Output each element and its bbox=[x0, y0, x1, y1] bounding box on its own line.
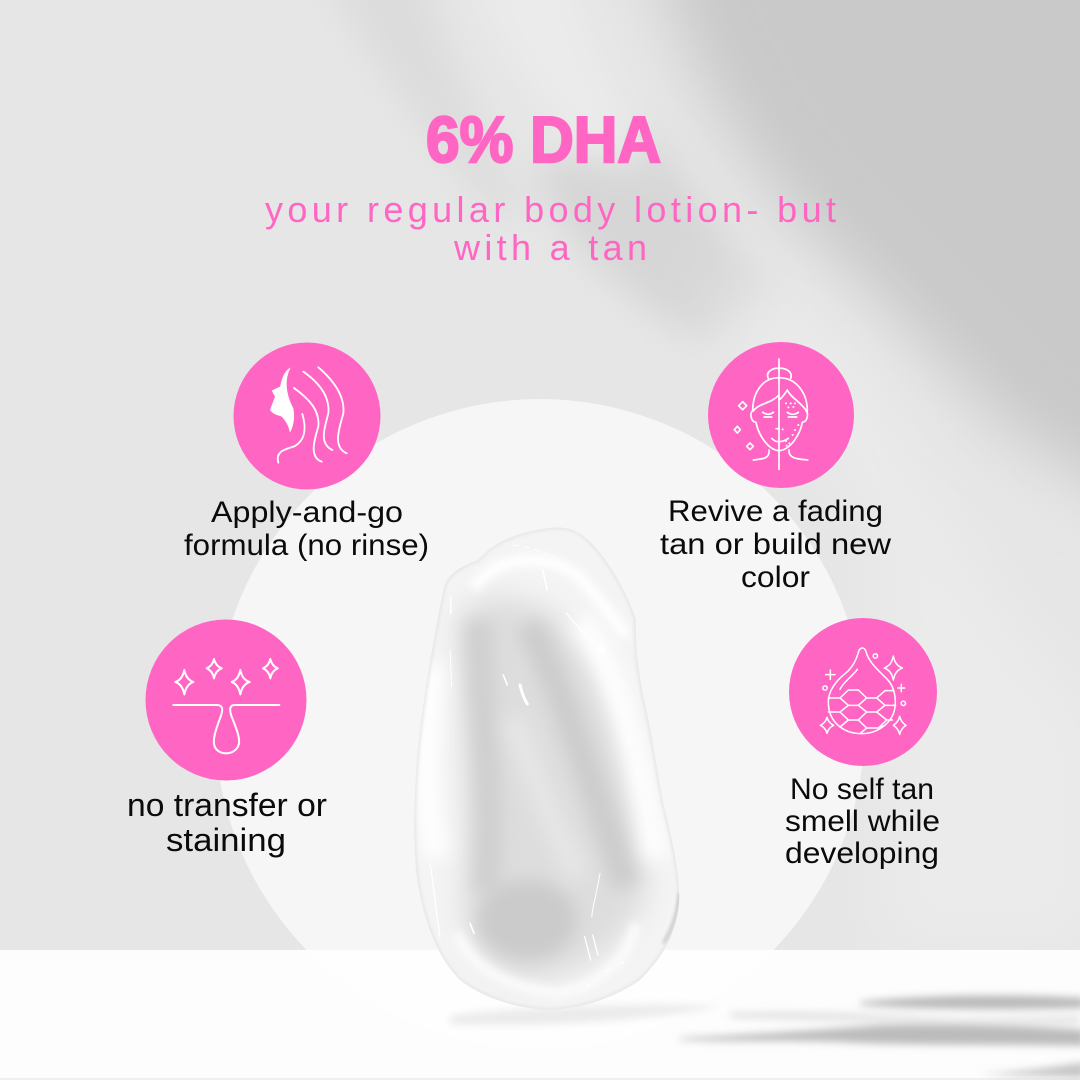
label: apply-and-go: formula (no rinse) bbox=[184, 529, 429, 562]
label: no smell: smell while bbox=[785, 805, 940, 838]
background wall with soft shadows bbox=[358, 0, 1080, 492]
label: revive tan: Revive a fading bbox=[668, 495, 883, 528]
title: 6% DHA bbox=[426, 103, 661, 176]
label: no transfer bbox=[127, 787, 327, 858]
label: revive tan: tan or build new bbox=[660, 528, 891, 561]
feature: revive tan bbox=[660, 342, 891, 594]
large translucent circle bbox=[215, 399, 865, 1049]
subtitle: your regular body lotion- but bbox=[265, 189, 836, 230]
feature: apply-and-go bbox=[184, 342, 429, 562]
lotion swatch bbox=[414, 527, 679, 1010]
label: no smell bbox=[785, 773, 940, 870]
feature: no transfer bbox=[127, 620, 327, 858]
feature: no smell bbox=[785, 618, 940, 870]
floor shadows bbox=[450, 995, 1080, 1078]
label: revive tan bbox=[660, 495, 891, 594]
icon: half face bbox=[708, 342, 854, 488]
subtitle: with a tan bbox=[453, 227, 647, 268]
label: apply-and-go: Apply-and-go bbox=[211, 496, 403, 529]
label: no smell: developing bbox=[785, 837, 939, 870]
icon: skin pore with sparkles bbox=[146, 620, 306, 780]
specular highlights bbox=[430, 545, 623, 987]
subtitle bbox=[265, 189, 836, 268]
icon: droplet with net bbox=[789, 618, 937, 766]
label: no transfer: no transfer or bbox=[127, 787, 327, 823]
icon: hair profile bbox=[234, 342, 380, 490]
label: no smell: No self tan bbox=[790, 773, 934, 806]
label: apply-and-go bbox=[184, 496, 429, 562]
label: no transfer: staining bbox=[166, 822, 286, 858]
floor bbox=[0, 950, 1080, 1080]
label: revive tan: color bbox=[741, 561, 810, 594]
